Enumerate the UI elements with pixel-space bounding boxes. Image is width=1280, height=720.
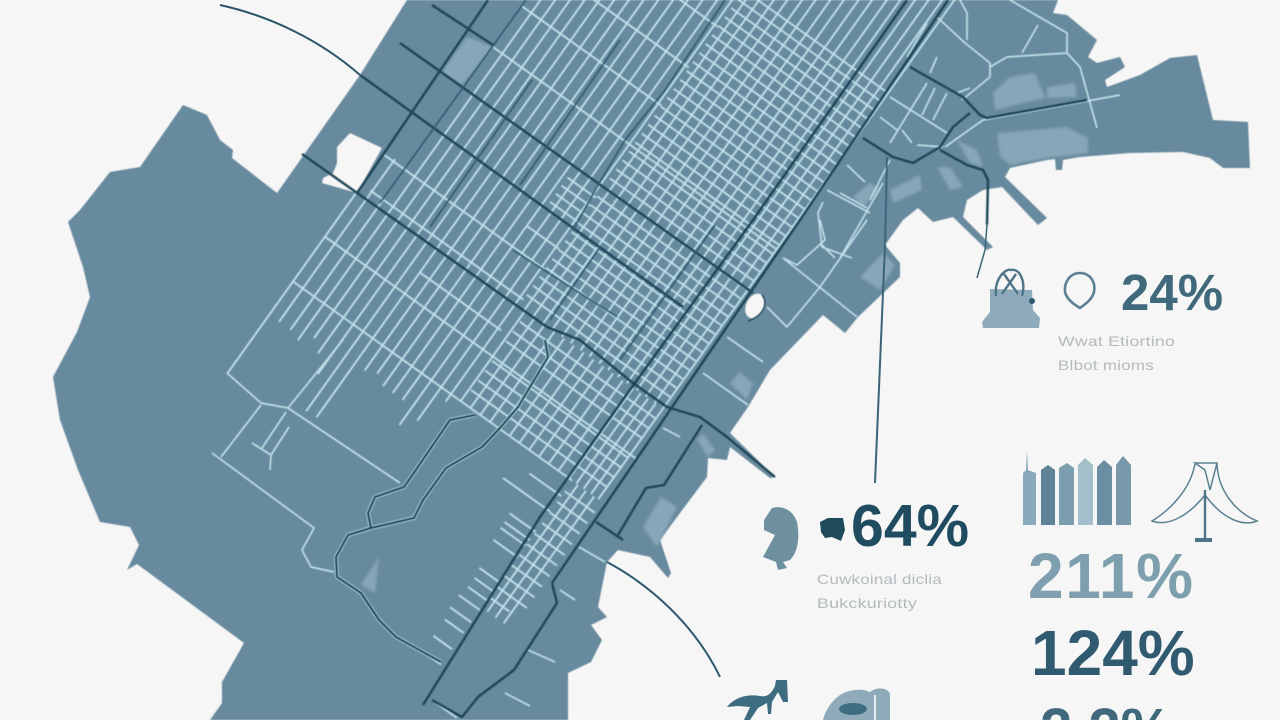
thin dark avenues [380,0,887,360]
value: 24% [1121,264,1223,321]
caption: Blbot mioms [1058,357,1154,373]
icon: landmark bag [982,270,1040,328]
lake hole [322,133,382,193]
east district streets [212,0,1120,718]
icon: ornate shell [823,688,890,720]
caption: Bukckuriotty [817,595,917,611]
icon: skyline bars [1023,450,1131,525]
icon: bridge [1152,463,1257,540]
icon: dark glyph [820,518,845,541]
ladder ticks west of broadway [431,472,562,666]
stat: 124%: 124% [1031,617,1195,689]
caption: Cuwkoinal diclia [817,571,942,587]
leader line to 24% icon [977,225,987,278]
cross streets long [293,0,776,482]
street grid [161,0,1120,718]
caption [1058,333,1175,373]
leader line bottom [607,562,720,677]
caption [817,571,942,611]
cross streets south core [470,320,656,613]
stat: 211%: 211% [1028,540,1193,612]
stat block: 24% [982,264,1223,373]
stat block: 64% [763,493,969,611]
northeast interchange [863,67,1087,225]
broadway trunk lines [423,0,948,705]
parks and lighter districts [361,37,1088,593]
icon: bird figure [727,680,788,720]
east waterfront road [596,425,702,540]
caption: Wwat Etiortino [1058,333,1175,349]
avenues dense core [524,0,981,409]
lower island loop [432,583,557,717]
cross streets dense core [527,0,887,397]
leader line top left [220,5,360,75]
value: 64% [851,493,969,559]
icon: seal figure [763,507,798,570]
white roundabout [741,290,769,322]
diagonal arterials [302,0,775,477]
icon: ring marker [1065,273,1094,308]
major dark roads [302,0,1087,717]
avenues south core [460,312,664,624]
river with light edge [336,340,548,662]
avenues west zone [226,0,734,426]
leader line to 64% stat [875,245,885,483]
